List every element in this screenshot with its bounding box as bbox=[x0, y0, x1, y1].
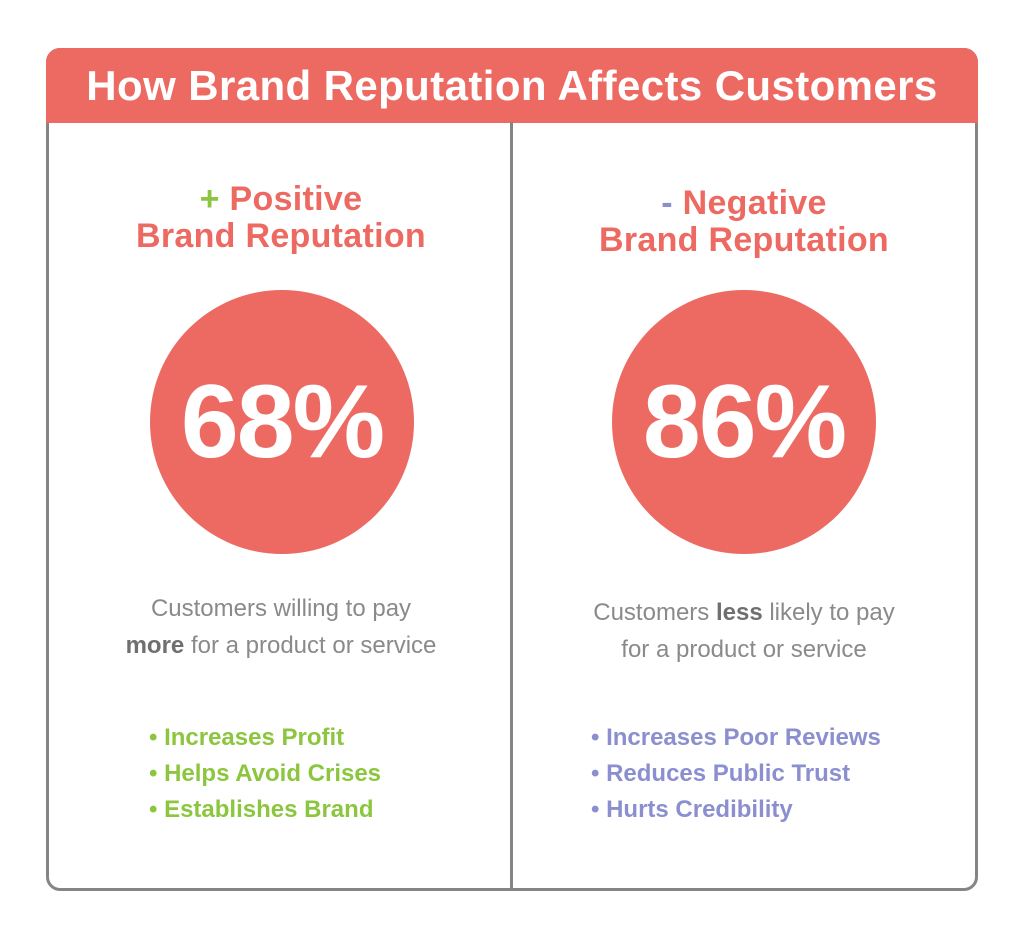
list: negative effects: • Reduces Public Trust bbox=[591, 760, 850, 787]
text: description positive: more for a product or service bbox=[126, 632, 436, 659]
circle: 86% bbox=[612, 290, 876, 554]
title bar bbox=[46, 48, 978, 123]
heading: negative bbox=[599, 184, 889, 259]
list: negative effects bbox=[591, 724, 881, 823]
divider bbox=[510, 122, 513, 889]
list: negative effects: • Hurts Credibility bbox=[591, 796, 793, 823]
heading: positive: Brand Reputation bbox=[136, 217, 426, 255]
circle: 68%: 68% bbox=[181, 364, 383, 480]
panel: positive bbox=[126, 180, 436, 823]
circle: 68% bbox=[150, 290, 414, 554]
panel: negative bbox=[591, 184, 895, 823]
heading: negative: Brand Reputation bbox=[599, 221, 889, 259]
list: negative effects: • Increases Poor Reviews bbox=[591, 724, 881, 751]
list: positive effects: • Increases Profit bbox=[149, 724, 344, 751]
heading: positive: + Positive bbox=[200, 180, 362, 218]
circle: 86%: 86% bbox=[643, 364, 845, 480]
text: description positive: Customers willing to pay bbox=[151, 595, 411, 622]
heading: negative: - Negative bbox=[661, 184, 827, 222]
title bar: How Brand Reputation Affects Customers bbox=[86, 62, 938, 109]
list: positive effects: • Helps Avoid Crises bbox=[149, 760, 381, 787]
heading: positive bbox=[136, 180, 426, 255]
text: description positive bbox=[126, 595, 436, 659]
list: positive effects bbox=[149, 724, 381, 823]
text: description negative: Customers less likely to pay bbox=[593, 599, 895, 626]
list: positive effects: • Establishes Brand bbox=[149, 796, 373, 823]
text: description negative: for a product or service bbox=[621, 636, 867, 663]
text: description negative bbox=[593, 599, 895, 663]
